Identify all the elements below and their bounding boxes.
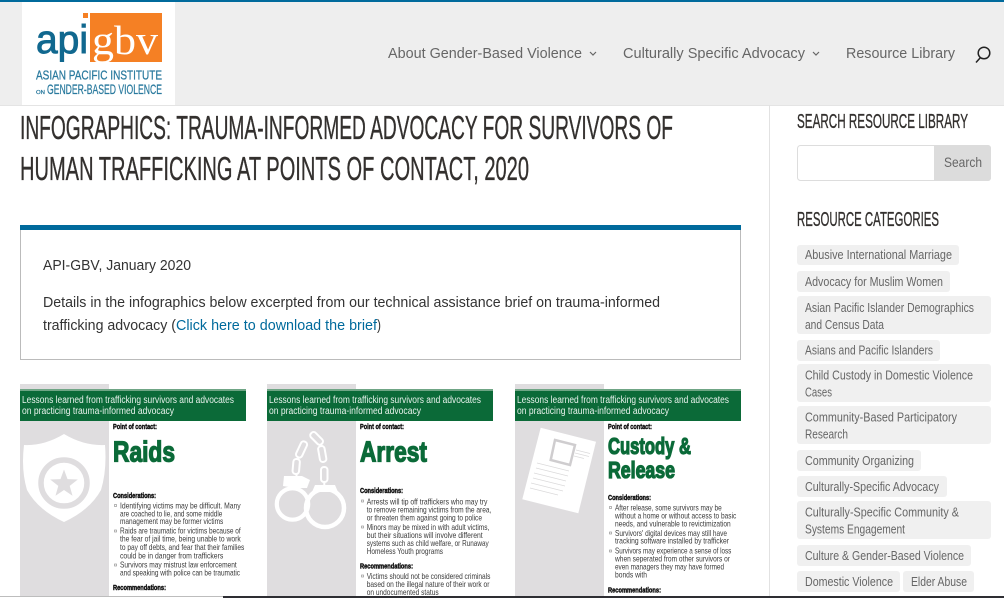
heading: arrest: Arrest [360,436,427,468]
considerations: the fear of jail time, being unable to work [120,534,241,543]
considerations: to remove remaining victims from the area, [367,506,491,515]
considerations: Homeless Youth programs [367,547,443,556]
considerations: bonds with [615,571,647,580]
banner [267,389,493,421]
logo: ASIAN PACIFIC INSTITUTE [36,68,162,82]
panel: arrest [267,384,493,598]
intro box: Click here to download the brief [176,318,378,334]
logo [22,2,175,105]
considerations: are coached to lie, and some middle [120,509,223,518]
considerations: Identifying victims may be difficult. Many [120,502,241,510]
heading: custody and release: Release [608,457,675,483]
page title: HUMAN TRAFFICKING AT POINTS OF CONTACT, 2020 [20,150,529,187]
considerations: After release, some survivors may be [615,503,722,512]
recommendations [360,562,490,597]
icon: handcuffs [277,431,344,527]
navigation menu: About Gender-Based Violence [388,45,582,62]
panel: custody and release: Recommendations: [608,586,661,594]
recommendations: Victims should not be considered criminals [367,572,490,581]
category tags: Culture & Gender-Based Violence [805,549,964,563]
considerations: management may be former victims [120,517,223,526]
panel: custody and release: Point of contact: [608,422,652,431]
considerations [360,486,491,556]
category tags: Advocacy for Muslim Women [805,275,943,289]
considerations: Minors may be mixed in with adult victims, [367,523,489,532]
considerations: Considerations: [360,486,403,495]
navigation menu [388,45,955,62]
icon: police badge [23,434,106,522]
panel: raids: Recommendations: [113,583,166,592]
logo: gbv [92,17,159,63]
search box [798,145,991,181]
intro box: ) [377,318,381,334]
considerations: Considerations: [608,493,651,502]
considerations: Survivors' digital devices may still have [615,529,727,538]
banner: on practicing trauma-informed advocacy [22,406,174,417]
considerations: even managers they may have formed [615,563,724,572]
banner: Lessons learned from trafficking survivors and advocates [517,395,729,406]
logo: ON [36,90,45,96]
considerations: needs, and vulnerable to revictimization [615,519,731,528]
category tags: Child Custody in Domestic Violence [805,368,973,382]
category tags: Asians and Pacific Islanders [805,344,933,358]
category tags: Abusive International Marriage [805,248,952,262]
banner [515,389,741,421]
category tags: Domestic Violence [805,575,893,589]
banner [20,389,246,421]
banner: Lessons learned from trafficking survivors and advocates [269,395,481,406]
considerations: but their situations will involve different [367,531,483,540]
bottom edge line [0,596,1004,598]
considerations: Raids are traumatic for victims because of [120,526,241,535]
panel: raids [20,384,246,598]
category tags: Cases [805,386,832,400]
intro box [20,225,741,360]
intro box: Details in the infographics below excerpted from our technical assistance brief on trauma-informed [43,295,660,311]
navigation menu: Culturally Specific Advocacy [623,45,805,62]
category tags: Research [805,428,848,442]
heading: raids: Raids [113,436,175,468]
intro box: trafficking advocacy ( [43,318,176,334]
considerations: without a home or without access to basic [614,511,736,520]
category tags: Community-Based Participatory [805,410,958,424]
page title [20,109,673,187]
heading: custody and release: Custody & [608,433,691,459]
category tags: Community Organizing [805,454,914,468]
navigation menu: Resource Library [846,45,955,62]
considerations: Survivors may mistrust law enforcement [120,560,237,569]
category tags: Culturally-Specific Community & [805,506,960,520]
logo: api [36,18,88,62]
considerations: to pay off debts, and fear that their families [120,543,244,552]
considerations: when seperated from other survivors or [614,555,730,564]
recommendations: based on the illegal nature of their work or [367,580,490,589]
recommendations: Recommendations: [360,562,413,571]
intro box: API-GBV, January 2020 [43,258,191,274]
category tags: Asian Pacific Islander Demographics [805,301,974,315]
banner: Lessons learned from trafficking survivors and advocates [22,395,234,406]
considerations: and speaking with police can be traumatic [120,568,240,577]
category tags: and Census Data [805,318,884,332]
considerations: Survivors may experience a sense of loss [615,547,731,556]
banner: on practicing trauma-informed advocacy [517,406,669,417]
category tags: Culturally-Specific Advocacy [805,480,940,494]
panel: arrest: Point of contact: [360,422,404,431]
sidebar [769,105,991,598]
panel: custody and release [515,384,741,598]
header bar [0,0,1004,106]
considerations: could be in danger from traffickers [120,551,223,560]
logo: GENDER-BASED VIOLENCE [47,81,162,97]
heading: custody and release [608,433,691,483]
considerations [608,493,736,580]
considerations: or threaten them against going to police [367,514,482,523]
category tags [797,245,991,592]
considerations: Considerations: [113,491,156,500]
category tags: Elder Abuse [911,575,967,589]
icon: search [976,47,990,62]
recommendations: on undocumented status [367,588,439,597]
banner: on practicing trauma-informed advocacy [269,406,421,417]
category tags: Systems Engagement [805,522,905,536]
search box: Search [944,154,982,170]
considerations [113,491,244,577]
considerations: tracking software installed by trafficker [615,537,729,546]
considerations: systems such as child welfare, or Runaway [367,539,489,548]
icon: document [522,428,596,513]
panel: raids: Point of contact: [113,422,157,431]
considerations: Arrests will tip off traffickers who may try [367,498,488,507]
